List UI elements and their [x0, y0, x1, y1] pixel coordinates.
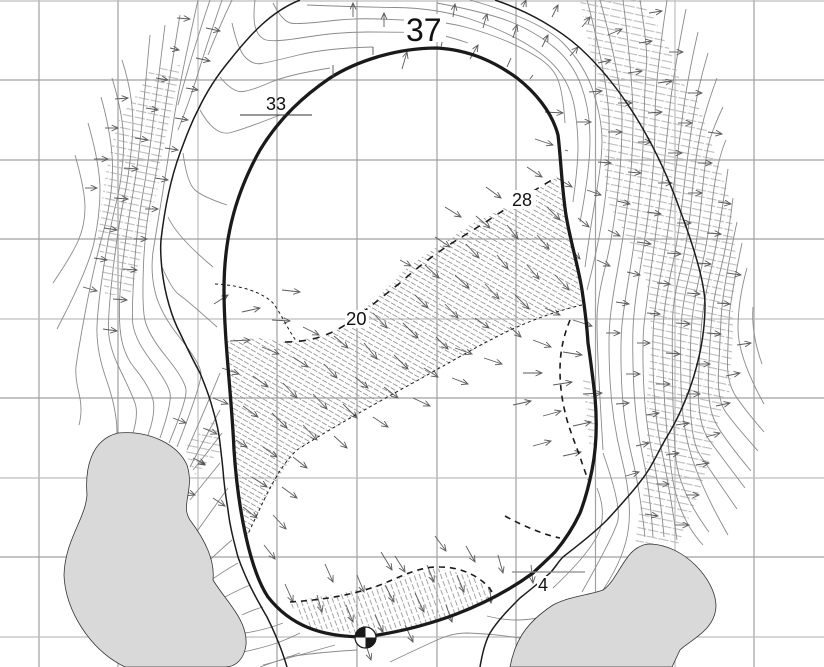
flow arrows: top — [353, 0, 578, 113]
grey island: right — [510, 544, 716, 667]
flow arrows: left band — [83, 18, 239, 506]
contour lines: top arcs — [162, 0, 609, 327]
thin outer boundary — [161, 0, 705, 667]
contour lines: left band — [53, 0, 232, 447]
grey island: left — [64, 433, 246, 667]
hatched zone: bottom — [288, 567, 492, 635]
label 20: 20 — [346, 308, 367, 329]
dashed line: bottom — [290, 567, 492, 602]
reference line for 4 — [512, 571, 585, 573]
dashed line: right side — [560, 320, 588, 480]
label 28: 28 — [512, 190, 532, 210]
label 4: 4 — [538, 575, 548, 595]
dashed isoline: upper central — [285, 177, 557, 342]
label 33: 33 — [266, 94, 286, 114]
hatched zone: central band — [228, 177, 582, 540]
flow arrows: central — [230, 139, 602, 529]
dotted line: upper left — [215, 284, 297, 342]
contour lines: around the islands — [187, 373, 537, 667]
label 37: 37 — [406, 12, 442, 48]
reference line for 33 — [240, 114, 312, 116]
thick main boundary — [224, 48, 596, 637]
hatching: corner beside left island — [183, 420, 222, 475]
dashed line: lower right — [505, 516, 560, 538]
small ticks on main boundary — [333, 38, 568, 151]
flow arrows: right band — [577, 11, 751, 525]
hatching: patch along right boundary — [583, 380, 598, 450]
station marker — [355, 627, 376, 648]
label 28 — [505, 190, 536, 210]
dotted boundary: lower central — [245, 305, 582, 540]
hatching: right steep band — [580, 0, 737, 545]
hatching: left steep band — [97, 65, 180, 295]
flow arrows: bottom — [264, 536, 533, 660]
contour lines: right band — [553, 0, 764, 592]
